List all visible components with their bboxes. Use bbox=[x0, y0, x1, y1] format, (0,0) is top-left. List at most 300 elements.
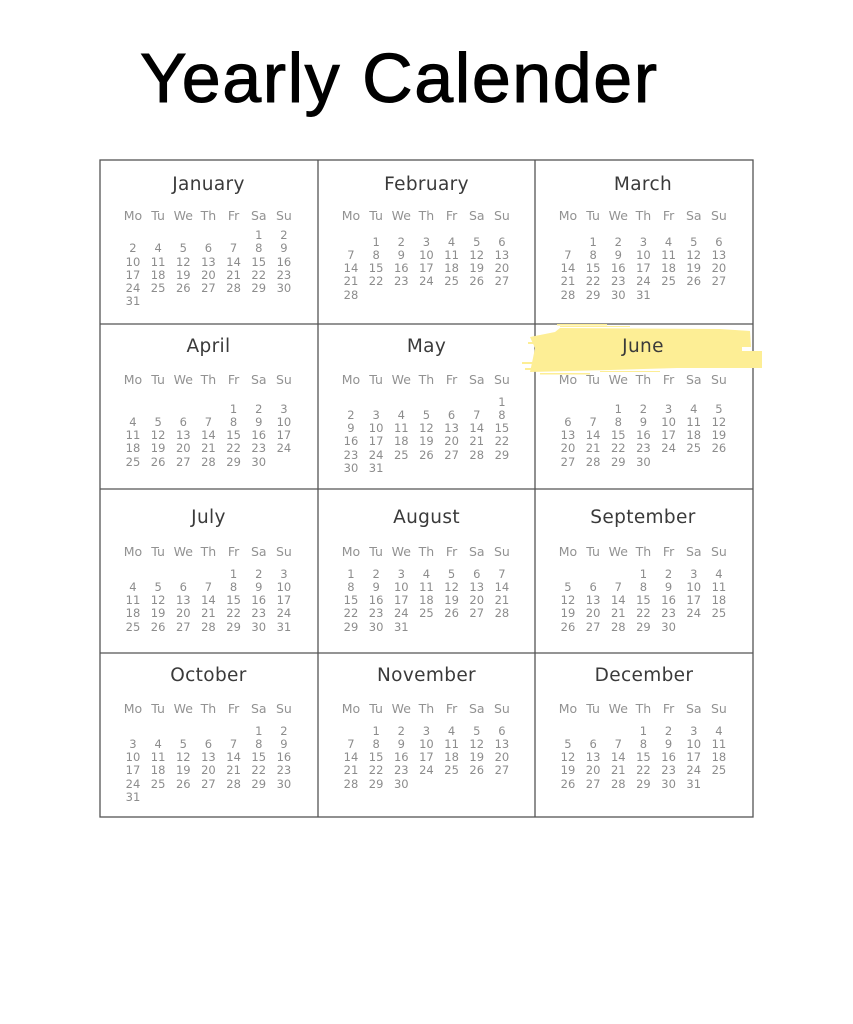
panel: December: Tu bbox=[586, 700, 600, 716]
panel: February: 5 bbox=[473, 234, 480, 248]
panel: November: 8 bbox=[372, 737, 380, 751]
panel: January: 19 bbox=[176, 268, 191, 282]
panel: October: 30 bbox=[277, 777, 291, 791]
panel: August: 1 bbox=[347, 566, 355, 580]
panel: January: 12 bbox=[176, 255, 191, 269]
panel: May: 13 bbox=[444, 421, 459, 435]
panel: November: 10 bbox=[419, 737, 434, 751]
panel: July: 19 bbox=[151, 606, 165, 620]
panel: November: 13 bbox=[495, 737, 509, 751]
panel: March: 28 bbox=[561, 288, 575, 302]
panel: July: 5 bbox=[154, 580, 162, 594]
panel: August: 10 bbox=[394, 580, 409, 594]
panel: September: 28 bbox=[611, 620, 626, 634]
panel: July: Th bbox=[201, 544, 216, 558]
panel: December: 29 bbox=[636, 777, 651, 791]
panel: February: Th bbox=[419, 208, 434, 223]
panel: November: Sa bbox=[469, 700, 485, 716]
panel: March: 12 bbox=[686, 248, 701, 262]
panel: June (highlighted month): 8 bbox=[615, 415, 622, 429]
panel: February: 16 bbox=[394, 261, 409, 275]
panel: August: 31 bbox=[394, 620, 409, 634]
panel: April: 8 bbox=[230, 415, 237, 429]
panel: October: 3 bbox=[129, 737, 137, 751]
panel: April: 16 bbox=[251, 428, 266, 442]
panel: October: 29 bbox=[251, 777, 266, 791]
panel: September: 27 bbox=[586, 620, 600, 634]
panel: August: 2 bbox=[372, 566, 380, 580]
panel: July: 9 bbox=[255, 580, 262, 594]
panel: July: Fr bbox=[228, 544, 239, 558]
panel: May: Th bbox=[419, 372, 434, 387]
panel: January: We bbox=[174, 208, 193, 223]
panel: May: 21 bbox=[469, 434, 484, 448]
panel: November: We bbox=[392, 700, 411, 716]
panel: August: 23 bbox=[369, 606, 383, 620]
panel: September: 10 bbox=[686, 580, 701, 594]
panel: May: 26 bbox=[419, 448, 434, 462]
panel: March: 6 bbox=[715, 234, 723, 248]
panel: May: 5 bbox=[423, 408, 430, 422]
panel: May: 4 bbox=[398, 408, 405, 422]
panel: July: 3 bbox=[280, 566, 288, 580]
panel: September: 9 bbox=[665, 580, 672, 594]
panel: September: 23 bbox=[661, 606, 676, 620]
panel: August: 24 bbox=[394, 606, 409, 620]
panel: January: Mo bbox=[124, 208, 142, 223]
panel: February: February bbox=[384, 174, 469, 195]
panel: July: 24 bbox=[277, 606, 291, 620]
panel: February: 10 bbox=[419, 248, 434, 262]
panel: May: Mo bbox=[342, 372, 360, 387]
panel: January: 25 bbox=[151, 281, 165, 295]
panel: February: Sa bbox=[469, 208, 485, 223]
panel: November: Fr bbox=[446, 700, 457, 716]
panel: March: Mo bbox=[559, 208, 577, 223]
panel: September: Su bbox=[711, 544, 727, 558]
panel: April: 20 bbox=[176, 441, 191, 455]
panel: September: 3 bbox=[690, 566, 697, 580]
panel: July: 22 bbox=[226, 606, 241, 620]
panel: April: Sa bbox=[251, 372, 267, 387]
panel: August: 19 bbox=[444, 593, 459, 607]
panel: March: 29 bbox=[586, 288, 600, 302]
panel: October: 2 bbox=[280, 724, 288, 738]
panel: December: 19 bbox=[561, 763, 575, 777]
panel: August: 22 bbox=[344, 606, 358, 620]
panel: April: 6 bbox=[180, 415, 187, 429]
panel: October: 13 bbox=[201, 750, 216, 764]
panel: December: Mo bbox=[559, 700, 577, 716]
panel: January bbox=[124, 174, 292, 308]
panel: January: 7 bbox=[230, 241, 237, 255]
panel: June (highlighted month): 11 bbox=[686, 415, 701, 429]
panel: July: 18 bbox=[126, 606, 140, 620]
panel: May: 9 bbox=[347, 421, 355, 435]
panel: May: Fr bbox=[446, 372, 457, 387]
panel: July: Tu bbox=[151, 544, 165, 558]
panel: March: 20 bbox=[712, 261, 726, 275]
panel: May: 11 bbox=[394, 421, 409, 435]
panel: March: 30 bbox=[611, 288, 626, 302]
panel: September: 6 bbox=[589, 580, 597, 594]
panel: January: 18 bbox=[151, 268, 165, 282]
panel: September: 5 bbox=[564, 580, 572, 594]
panel: March: 10 bbox=[636, 248, 651, 262]
panel: December: 1 bbox=[640, 724, 647, 738]
panel: August: 3 bbox=[398, 566, 405, 580]
panel: December: 23 bbox=[661, 763, 676, 777]
panel: June (highlighted month): 1 bbox=[615, 402, 622, 416]
panel: October: 27 bbox=[201, 777, 216, 791]
panel: October: October bbox=[170, 665, 247, 686]
panel: January: 9 bbox=[280, 241, 288, 255]
panel: May: 14 bbox=[469, 421, 484, 435]
panel: March: 23 bbox=[611, 274, 626, 288]
panel: April: 23 bbox=[251, 441, 266, 455]
panel: December: 20 bbox=[586, 763, 600, 777]
panel: January: 24 bbox=[126, 281, 140, 295]
panel: January: Fr bbox=[228, 208, 239, 223]
panel: December: 24 bbox=[686, 763, 701, 777]
panel: September: 16 bbox=[661, 593, 676, 607]
panel: August: Su bbox=[494, 544, 510, 558]
panel: February bbox=[342, 174, 510, 302]
panel: March: 22 bbox=[586, 274, 600, 288]
panel: May: 2 bbox=[347, 408, 355, 422]
panel: August: 5 bbox=[448, 566, 455, 580]
panel: June (highlighted month): 22 bbox=[611, 441, 626, 455]
panel: August: 30 bbox=[369, 620, 383, 634]
panel: December: We bbox=[609, 700, 628, 716]
panel: October: Fr bbox=[228, 700, 239, 716]
panel: April bbox=[124, 336, 292, 469]
panel: June (highlighted month): 21 bbox=[586, 441, 600, 455]
panel: December: 27 bbox=[586, 777, 600, 791]
panel: May: 12 bbox=[419, 421, 434, 435]
panel: February: 7 bbox=[347, 248, 355, 262]
panel: November: Th bbox=[419, 700, 434, 716]
panel: June (highlighted month): Fr bbox=[663, 372, 674, 387]
panel: October: 31 bbox=[126, 790, 140, 804]
panel: October bbox=[124, 665, 292, 804]
panel: October: 10 bbox=[126, 750, 140, 764]
panel: July: 4 bbox=[129, 580, 137, 594]
panel: May: 20 bbox=[444, 434, 459, 448]
panel: October: 20 bbox=[201, 763, 216, 777]
panel: October: 7 bbox=[230, 737, 237, 751]
panel: July: 25 bbox=[126, 620, 140, 634]
panel: December: 18 bbox=[712, 750, 726, 764]
panel: March: Th bbox=[636, 208, 651, 223]
panel: February: 4 bbox=[448, 234, 455, 248]
panel: September: 17 bbox=[686, 593, 701, 607]
panel: October: 11 bbox=[151, 750, 165, 764]
panel: September: We bbox=[609, 544, 628, 558]
panel: May: 7 bbox=[473, 408, 480, 422]
panel: August: 7 bbox=[498, 566, 506, 580]
panel: September: 29 bbox=[636, 620, 651, 634]
panel: September: September bbox=[590, 507, 696, 528]
panel: November: 28 bbox=[344, 777, 358, 791]
panel: January: 13 bbox=[201, 255, 216, 269]
panel: April: 28 bbox=[201, 455, 216, 469]
panel: August: Sa bbox=[469, 544, 485, 558]
panel: September: 18 bbox=[712, 593, 726, 607]
panel: January: 14 bbox=[226, 255, 241, 269]
panel: December: 9 bbox=[665, 737, 672, 751]
panel: June (highlighted month): 2 bbox=[640, 402, 647, 416]
panel: March bbox=[559, 174, 727, 302]
panel: March: 25 bbox=[661, 274, 676, 288]
panel: July: Sa bbox=[251, 544, 267, 558]
panel: September: 25 bbox=[712, 606, 726, 620]
panel: December: Sa bbox=[686, 700, 702, 716]
panel: February: Tu bbox=[369, 208, 383, 223]
panel: April: 17 bbox=[277, 428, 291, 442]
panel: March: Su bbox=[711, 208, 727, 223]
panel: June (highlighted month): 10 bbox=[661, 415, 676, 429]
panel: May: 10 bbox=[369, 421, 383, 435]
panel: July: 8 bbox=[230, 580, 237, 594]
panel: April: 5 bbox=[154, 415, 162, 429]
panel: May: 22 bbox=[495, 434, 509, 448]
panel: July: 6 bbox=[180, 580, 187, 594]
panel: January: 21 bbox=[226, 268, 241, 282]
panel: July: 11 bbox=[126, 593, 140, 607]
panel: May: 29 bbox=[495, 448, 509, 462]
panel: June (highlighted month): 23 bbox=[636, 441, 651, 455]
panel: March: 1 bbox=[589, 234, 597, 248]
panel: December: 31 bbox=[686, 777, 701, 791]
panel: July: 17 bbox=[277, 593, 291, 607]
panel: February: 21 bbox=[344, 274, 358, 288]
panel: April: Mo bbox=[124, 372, 142, 387]
panel: August: Tu bbox=[369, 544, 383, 558]
panel: March: 3 bbox=[640, 234, 647, 248]
panel: February: 12 bbox=[469, 248, 484, 262]
panel: February: Fr bbox=[446, 208, 457, 223]
panel: December: 2 bbox=[665, 724, 672, 738]
panel: November: 3 bbox=[423, 724, 430, 738]
panel: October: 23 bbox=[277, 763, 291, 777]
panel: December bbox=[559, 665, 727, 791]
panel: October: 6 bbox=[205, 737, 212, 751]
panel: July: 31 bbox=[277, 620, 291, 634]
panel: August: August bbox=[393, 507, 460, 528]
panel: February: 23 bbox=[394, 274, 409, 288]
panel: April: 12 bbox=[151, 428, 165, 442]
panel: June (highlighted month): 25 bbox=[686, 441, 701, 455]
panel: January: 29 bbox=[251, 281, 266, 295]
panel: January: 27 bbox=[201, 281, 216, 295]
panel: April: 11 bbox=[126, 428, 140, 442]
panel: November: 2 bbox=[398, 724, 405, 738]
panel: March: We bbox=[609, 208, 628, 223]
panel: September: 15 bbox=[636, 593, 651, 607]
panel: June (highlighted month): June bbox=[622, 336, 664, 357]
panel: May: 8 bbox=[498, 408, 506, 422]
panel: March: 27 bbox=[712, 274, 726, 288]
panel: April: 7 bbox=[205, 415, 212, 429]
panel: July: 23 bbox=[251, 606, 266, 620]
panel: February: 27 bbox=[495, 274, 509, 288]
panel: November: 5 bbox=[473, 724, 480, 738]
panel: December: 11 bbox=[712, 737, 726, 751]
panel: January: 1 bbox=[255, 228, 262, 242]
panel: July: 21 bbox=[201, 606, 216, 620]
panel: August: Mo bbox=[342, 544, 360, 558]
panel: June (highlighted month): 28 bbox=[586, 455, 600, 469]
panel: February: Mo bbox=[342, 208, 360, 223]
panel: September: 13 bbox=[586, 593, 600, 607]
panel: April: 19 bbox=[151, 441, 165, 455]
panel: April: 14 bbox=[201, 428, 216, 442]
panel: June (highlighted month): 5 bbox=[715, 402, 723, 416]
panel: February: 14 bbox=[344, 261, 358, 275]
panel: April: 25 bbox=[126, 455, 140, 469]
panel: July: July bbox=[191, 507, 226, 528]
panel: July: 13 bbox=[176, 593, 191, 607]
panel: June (highlighted month): 6 bbox=[564, 415, 572, 429]
panel: October: 1 bbox=[255, 724, 262, 738]
panel: December: 21 bbox=[611, 763, 626, 777]
panel: June (highlighted month): 26 bbox=[712, 441, 726, 455]
panel: May: 30 bbox=[344, 461, 358, 475]
panel: September: Sa bbox=[686, 544, 702, 558]
panel: December: 6 bbox=[589, 737, 597, 751]
panel: February: 25 bbox=[444, 274, 459, 288]
panel: July: 28 bbox=[201, 620, 216, 634]
panel: May: 17 bbox=[369, 434, 383, 448]
panel: July: 12 bbox=[151, 593, 165, 607]
panel: January: 15 bbox=[251, 255, 266, 269]
panel: August: 29 bbox=[344, 620, 358, 634]
panel: July: 14 bbox=[201, 593, 216, 607]
panel: February: 24 bbox=[419, 274, 434, 288]
panel: October: 25 bbox=[151, 777, 165, 791]
panel: August: 9 bbox=[372, 580, 380, 594]
panel: January: 17 bbox=[126, 268, 140, 282]
panel: September: 11 bbox=[712, 580, 726, 594]
panel: July: 30 bbox=[251, 620, 266, 634]
panel: December: 12 bbox=[561, 750, 575, 764]
panel: September: 8 bbox=[640, 580, 647, 594]
panel: November: 7 bbox=[347, 737, 355, 751]
panel: November: 30 bbox=[394, 777, 409, 791]
panel: February: 2 bbox=[398, 234, 405, 248]
panel: July bbox=[124, 507, 292, 634]
panel: November: 21 bbox=[344, 763, 358, 777]
panel: April: Tu bbox=[151, 372, 165, 387]
panel: August: 15 bbox=[344, 593, 358, 607]
panel: October: 5 bbox=[180, 737, 187, 751]
panel: January: 2 bbox=[129, 241, 137, 255]
panel: May: 3 bbox=[372, 408, 380, 422]
panel: June (highlighted month): 29 bbox=[611, 455, 626, 469]
panel: August: 18 bbox=[419, 593, 434, 607]
panel: April: 27 bbox=[176, 455, 191, 469]
panel: March: 16 bbox=[611, 261, 626, 275]
panel: June (highlighted month): 7 bbox=[589, 415, 597, 429]
panel: March: 9 bbox=[615, 248, 622, 262]
panel: December: 28 bbox=[611, 777, 626, 791]
panel: December: Fr bbox=[663, 700, 674, 716]
panel: January: Sa bbox=[251, 208, 267, 223]
panel: February: 1 bbox=[372, 234, 380, 248]
panel: December: 26 bbox=[561, 777, 575, 791]
panel: November: 24 bbox=[419, 763, 434, 777]
panel: November: 27 bbox=[495, 763, 509, 777]
panel: October: Su bbox=[276, 700, 292, 716]
panel: August: 20 bbox=[469, 593, 484, 607]
panel: March: 18 bbox=[661, 261, 676, 275]
panel: September: 7 bbox=[615, 580, 622, 594]
panel: November: 14 bbox=[344, 750, 358, 764]
panel: June (highlighted month): 13 bbox=[561, 428, 575, 442]
panel: June (highlighted month): 19 bbox=[712, 428, 726, 442]
panel: May: 31 bbox=[369, 461, 383, 475]
panel: July: 16 bbox=[251, 593, 266, 607]
panel: March: 13 bbox=[712, 248, 726, 262]
panel: June (highlighted month) bbox=[559, 336, 727, 469]
panel: December: 8 bbox=[640, 737, 647, 751]
panel: November: 22 bbox=[369, 763, 383, 777]
panel: August: Fr bbox=[446, 544, 457, 558]
panel: December: 14 bbox=[611, 750, 626, 764]
panel: July: Su bbox=[276, 544, 292, 558]
panel: December: December bbox=[595, 665, 693, 686]
panel: September: 26 bbox=[561, 620, 575, 634]
panel: March: 31 bbox=[636, 288, 651, 302]
panel: July: 15 bbox=[226, 593, 241, 607]
panel: January: 2 bbox=[280, 228, 288, 242]
panel: May: We bbox=[392, 372, 411, 387]
panel: February: 26 bbox=[469, 274, 484, 288]
panel: July: Mo bbox=[124, 544, 142, 558]
panel: June (highlighted month): 30 bbox=[636, 455, 651, 469]
panel: June (highlighted month): We bbox=[609, 372, 628, 387]
panel: April: 22 bbox=[226, 441, 241, 455]
panel: January: Su bbox=[276, 208, 292, 223]
panel: June (highlighted month): 20 bbox=[561, 441, 575, 455]
panel: August: 21 bbox=[495, 593, 509, 607]
panel: July: 27 bbox=[176, 620, 191, 634]
panel: May: 23 bbox=[344, 448, 358, 462]
panel: March: 14 bbox=[561, 261, 575, 275]
panel: January: 4 bbox=[154, 241, 162, 255]
panel: May: 28 bbox=[469, 448, 484, 462]
panel: November: November bbox=[377, 665, 476, 686]
panel: October: 24 bbox=[126, 777, 140, 791]
panel: April: 9 bbox=[255, 415, 262, 429]
panel: May: Tu bbox=[369, 372, 383, 387]
panel: October: 26 bbox=[176, 777, 191, 791]
panel: May bbox=[342, 336, 510, 475]
panel: April: April bbox=[186, 336, 231, 357]
panel: October: Sa bbox=[251, 700, 267, 716]
panel: October: 19 bbox=[176, 763, 191, 777]
panel: October: 12 bbox=[176, 750, 191, 764]
panel: May: Sa bbox=[469, 372, 485, 387]
panel: December: 5 bbox=[564, 737, 572, 751]
panel: March: 2 bbox=[615, 234, 622, 248]
panel: August: 26 bbox=[444, 606, 459, 620]
panel: August: 11 bbox=[419, 580, 434, 594]
panel: October: 8 bbox=[255, 737, 262, 751]
panel: November: 12 bbox=[469, 737, 484, 751]
panel: September: 21 bbox=[611, 606, 626, 620]
